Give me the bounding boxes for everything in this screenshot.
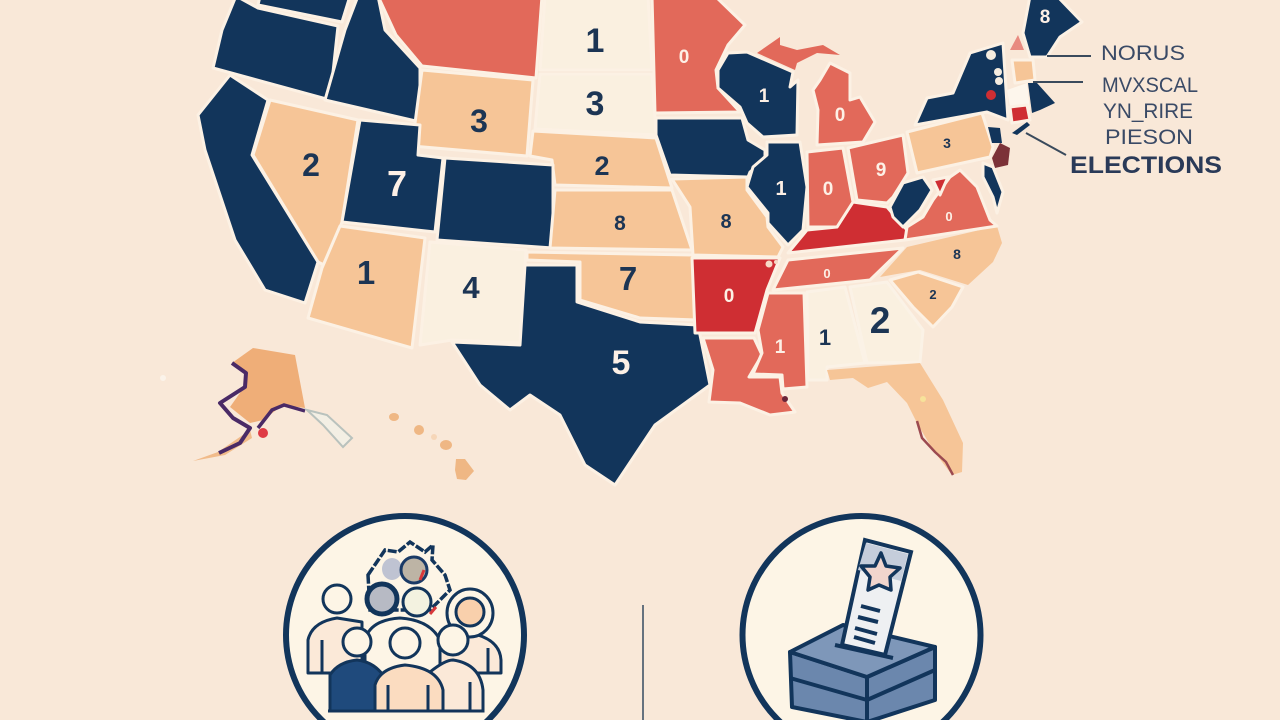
state: Michigan upper: [757, 37, 840, 70]
number: Oklahoma: 7: [619, 260, 637, 297]
number: Georgia: 2: [870, 300, 890, 341]
Alaska southern coastline: [258, 405, 305, 428]
legend labels: [1026, 42, 1222, 179]
box front: [790, 652, 867, 720]
label: Elections: ELECTIONS: [1070, 152, 1222, 179]
ballot box body: [790, 625, 935, 720]
icon: ballot box: [742, 516, 980, 720]
state: Maine: [1023, 0, 1082, 57]
label: Mxscal: MVXSCAL: [1102, 74, 1198, 97]
state: Minnesota: [652, 0, 745, 113]
state: Texas: [452, 265, 710, 485]
ballot sheet: [842, 540, 911, 655]
Louisiana delta mark: [782, 396, 788, 402]
state: Missouri: [672, 177, 783, 257]
number: Pennsylvania: 3: [943, 135, 951, 151]
number: Wisconsin: 1: [759, 86, 770, 107]
state: Virginia: [905, 170, 997, 240]
state: Iowa: [656, 118, 765, 177]
Alaska red spot: [258, 428, 268, 438]
state: Delaware: [992, 143, 1010, 168]
state: Maryland: [933, 177, 948, 195]
state: South Dakota: [535, 74, 656, 135]
number: Kansas: 8: [614, 212, 626, 235]
grey head: [382, 558, 402, 580]
Florida yellow spot: [920, 396, 926, 402]
state: North Dakota: [540, 0, 652, 70]
state: Oregon: [213, 0, 338, 100]
person: back left: [308, 585, 362, 673]
state: Colorado: [437, 158, 553, 248]
red accent: [420, 570, 424, 580]
number: Michigan: 0: [835, 105, 845, 126]
number: North Dakota: 1: [586, 22, 604, 60]
number: South Dakota: 3: [586, 85, 604, 123]
island: Maui: [440, 440, 452, 450]
label: Norus: NORUS: [1101, 42, 1185, 65]
state: Vermont and New Hampshire: [1012, 60, 1035, 83]
state: Kentucky: [788, 202, 907, 253]
leader line: bottom: [1026, 133, 1066, 155]
number: Minnesota: 0: [679, 47, 689, 68]
Florida dark coast: [917, 421, 953, 475]
box top: [790, 625, 935, 677]
state: West Virginia: [890, 177, 932, 227]
box lid band: [790, 670, 935, 700]
magnified head: [401, 557, 427, 583]
state: Michigan lower: [813, 63, 875, 145]
state: Connecticut: [1010, 105, 1030, 123]
number: South Carolina: 2: [929, 287, 937, 302]
ballot lines: [854, 606, 880, 643]
box slot: [835, 645, 893, 658]
state: Nebraska: [530, 131, 672, 188]
number: Maine: 8: [1040, 7, 1050, 28]
marker: New Hampshire notch: [1010, 35, 1024, 50]
number: New Mexico: 4: [462, 270, 480, 305]
state: Washington: [258, 0, 350, 22]
person: back right: [440, 589, 501, 673]
state: Cape Cod: [1028, 83, 1055, 113]
red accent lower: [430, 607, 436, 614]
state: Utah: [342, 120, 443, 232]
number: Nebraska: 2: [594, 151, 610, 181]
number: Missouri: 8: [720, 211, 732, 233]
person: front centre: [375, 628, 443, 711]
Alaska landmass: [230, 348, 305, 423]
ballot paper: [842, 540, 911, 655]
ballot star: [861, 553, 900, 590]
label: Pieson: PIESON: [1105, 126, 1193, 149]
state: Nevada: [253, 100, 358, 266]
ground line: [328, 710, 483, 712]
state: Oklahoma: [527, 252, 697, 320]
Arkansas river spots: [766, 260, 778, 268]
number: Wyoming: 3: [470, 103, 488, 139]
leader line: top: [1047, 55, 1091, 57]
state: Wisconsin: [718, 52, 798, 137]
Hawaii: [389, 413, 474, 480]
white spots in New York: [986, 50, 1003, 85]
state: Tennessee: [773, 248, 903, 290]
state: Kansas: [550, 190, 692, 250]
state: Illinois: [747, 142, 807, 245]
state: Pennsylvania: [907, 113, 993, 173]
box right: [867, 647, 935, 720]
state: New Mexico: [420, 242, 526, 345]
number: Arkansas: 0: [724, 286, 734, 307]
state: Arizona: [308, 226, 425, 348]
ballot header: [858, 543, 908, 581]
state numbers: [302, 7, 1050, 382]
island: Oahu: [414, 425, 424, 435]
island: Molokai: [431, 434, 437, 440]
state: Montana: [378, 0, 542, 78]
crowd behind: [368, 542, 450, 614]
state: Louisiana: [703, 338, 795, 415]
number: Nevada: 2: [302, 147, 320, 183]
state: Massachusetts: [1007, 83, 1030, 110]
number: Arizona: 1: [357, 254, 375, 291]
number: Virginia: 0: [945, 209, 953, 224]
label: Yn Rire: YN_RIRE: [1103, 100, 1193, 123]
number: Texas: 5: [612, 344, 630, 382]
Alaska: [160, 348, 352, 461]
number: Tennessee: 0: [823, 266, 831, 281]
person: front right: [430, 625, 483, 711]
Alaska coastline: [219, 363, 250, 453]
state: Georgia: [850, 282, 923, 363]
number: Illinois: 1: [775, 178, 787, 200]
divider: [642, 605, 644, 720]
number: North Carolina: 8: [953, 246, 961, 262]
state: New York: [915, 43, 1008, 125]
crowd outline: [368, 542, 450, 610]
number: Utah: 7: [387, 163, 407, 204]
state: Florida: [827, 363, 963, 475]
state: Indiana: [807, 148, 853, 227]
icon: group of people: [286, 516, 524, 720]
state: Delmarva: [983, 163, 1003, 213]
state: North Carolina: [880, 226, 1002, 285]
island: Big Island: [455, 459, 474, 480]
number: Indiana: 0: [823, 179, 833, 200]
state: Ohio: [848, 135, 908, 203]
person: back centre: [365, 584, 440, 680]
number: Alabama: 1: [819, 325, 831, 350]
number: Mississippi: 1: [775, 337, 786, 358]
icon circle: [742, 516, 980, 720]
state: Idaho: [325, 0, 420, 122]
Alaska tail: [193, 430, 252, 461]
Alaska panhandle: [307, 410, 352, 447]
state: New Jersey: [988, 127, 1002, 143]
number: Ohio: 9: [876, 160, 886, 181]
marker: New York spot: [986, 90, 996, 100]
state: Alabama: [807, 287, 865, 380]
state: Wyoming: [412, 70, 533, 156]
state: Long Island: [1012, 122, 1030, 135]
island: Kauai: [389, 413, 399, 421]
leader line: middle: [1033, 81, 1083, 83]
person: front left navy: [330, 628, 385, 711]
map of the United States: [198, 0, 1082, 485]
icon circle: [286, 516, 524, 720]
state: California: [198, 75, 318, 303]
state: South Carolina: [890, 272, 963, 327]
state: Arkansas: [692, 258, 780, 333]
state: Mississippi: [753, 293, 807, 389]
Aleutian speck: [160, 375, 166, 381]
